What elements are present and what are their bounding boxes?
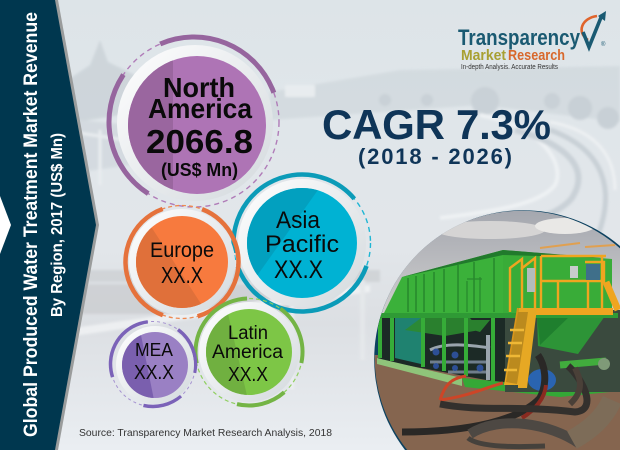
logo: Transparency Market Research <box>458 11 606 71</box>
lower skid <box>377 358 462 386</box>
logo icon: check mark <box>582 11 606 47</box>
tank upper box <box>382 250 503 317</box>
left banner <box>0 0 99 450</box>
bubble: North America: North <box>163 72 235 103</box>
bubble: MEA: XX.X <box>134 362 174 384</box>
CAGR heading: CAGR 7.3% <box>322 101 551 148</box>
hoses <box>440 376 503 400</box>
bubble: Asia Pacific: Asia <box>276 207 321 234</box>
bubble: Asia Pacific <box>231 172 372 314</box>
bubble: Latin America: Latin <box>228 323 268 344</box>
bubble: Asia Pacific: XX.X <box>274 256 323 284</box>
logo: Transparency Market Research: Market <box>461 47 506 64</box>
banner subtitle: By Region, 2017 (US$ Mn) <box>49 133 66 317</box>
bubble: Europe <box>123 204 241 320</box>
yellow rails and platform <box>510 258 535 312</box>
bubble: Europe: XX.X <box>161 262 203 288</box>
ladder <box>505 308 525 385</box>
bubble: Latin America: XX.X <box>228 364 268 386</box>
logo: Transparency Market Research: Research <box>508 47 565 64</box>
CAGR period: (2018 - 2026) <box>358 144 512 169</box>
bubble: Latin America: America <box>212 342 283 363</box>
bubble: North America <box>106 34 280 208</box>
dark machine bays <box>378 317 505 382</box>
logo: Transparency Market Research: Transparency <box>458 25 581 50</box>
bubble: Latin America <box>194 296 305 408</box>
bubble: Europe: Europe <box>150 239 214 262</box>
photo: green water treatment unit <box>360 205 620 450</box>
logo: Transparency Market Research: In-depth Analysis. Accurate Results <box>461 64 558 71</box>
logo: Transparency Market Research: ® <box>601 41 606 48</box>
right machinery <box>505 310 620 392</box>
bubble: MEA: MEA <box>135 340 173 360</box>
ground <box>370 355 620 450</box>
bubble: North America: America <box>148 93 252 124</box>
green pipe <box>560 361 606 365</box>
blue drum <box>528 369 556 391</box>
banner notch arrow <box>0 196 11 254</box>
source note: Source: Transparency Market Research Analysis, 2018 <box>79 427 332 439</box>
bubble: Asia Pacific: Pacific <box>265 231 339 258</box>
bubble: North America: (US$ Mn) <box>161 160 238 180</box>
bubble: North America: 2066.8 <box>146 123 253 160</box>
bubble: MEA <box>108 320 198 408</box>
